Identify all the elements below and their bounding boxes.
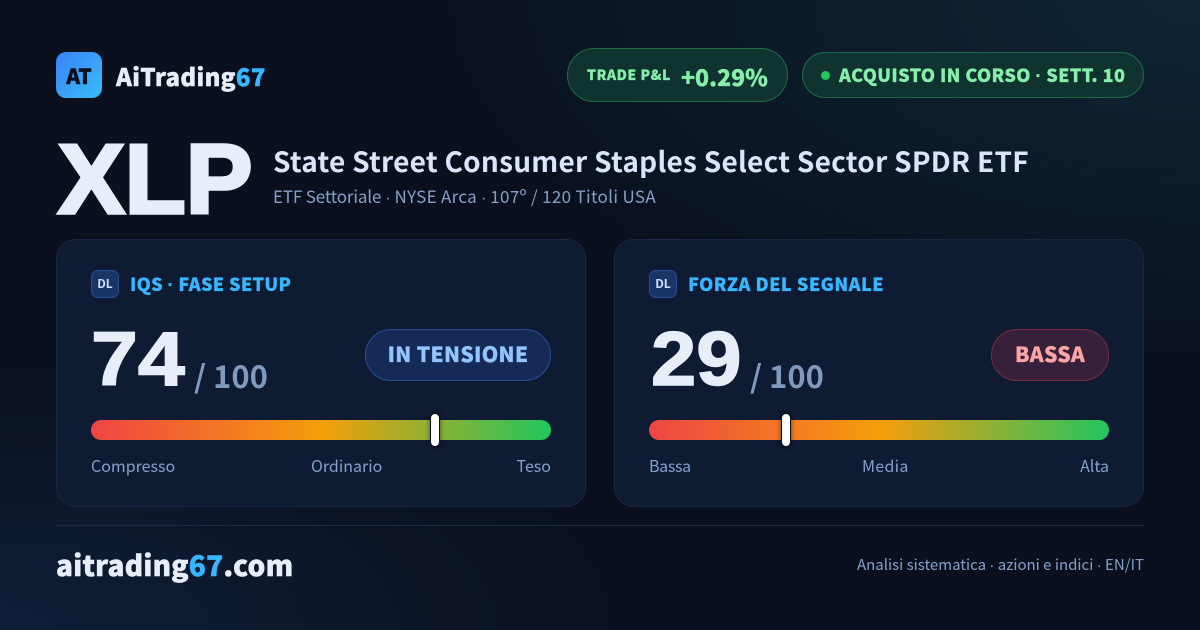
icon: DL bbox=[649, 270, 677, 298]
status pill: IN TENSIONE bbox=[388, 339, 528, 369]
badge: status bbox=[802, 52, 1144, 98]
gauge label mid: Ordinario bbox=[311, 453, 382, 477]
brand name: AiTrading67 bbox=[116, 58, 266, 93]
score scale: / 100 bbox=[750, 352, 824, 397]
footer tagline: Analisi sistematica · azioni e indici · EN/IT bbox=[857, 554, 1144, 575]
badge: trade P&L bbox=[567, 48, 788, 102]
icon: DL bbox=[91, 270, 119, 298]
icon: DL: DL bbox=[655, 275, 671, 292]
panel: IQS fase setup bbox=[56, 239, 586, 507]
badge: trade P&L: TRADE P&L bbox=[587, 65, 671, 85]
panel heading: IQS · FASE SETUP bbox=[130, 271, 291, 297]
fund name: State Street Consumer Staples Select Sector SPDR ETF bbox=[273, 141, 1029, 181]
gauge label low: Compresso bbox=[91, 453, 175, 477]
gradient gauge bbox=[91, 420, 551, 440]
badge: trade P&L: +0.29% bbox=[681, 59, 768, 93]
panel heading: FORZA DEL SEGNALE bbox=[688, 271, 884, 297]
gauge label low: Bassa bbox=[649, 453, 691, 477]
badge: status: ACQUISTO IN CORSO · SETT. 10 bbox=[839, 62, 1125, 88]
divider bbox=[56, 525, 1144, 526]
gauge label mid: Media bbox=[862, 453, 909, 477]
ticker: XLP bbox=[58, 124, 252, 234]
panel: forza del segnale bbox=[614, 239, 1144, 507]
score scale: / 100 bbox=[194, 352, 268, 397]
gradient gauge bbox=[649, 420, 1109, 440]
score: 29 bbox=[651, 317, 741, 402]
footer site: aitrading67.com bbox=[56, 545, 293, 585]
gauge marker bbox=[781, 413, 791, 447]
gauge label high: Alta bbox=[1080, 453, 1109, 477]
status pill bbox=[991, 329, 1109, 381]
logo icon: AT bbox=[66, 61, 92, 91]
score: 74 bbox=[91, 317, 185, 402]
fund subtitle: ETF Settoriale · NYSE Arca · 107º / 120 Titoli USA bbox=[273, 183, 656, 208]
status pill bbox=[365, 329, 551, 381]
gauge marker bbox=[430, 413, 440, 447]
status pill: BASSA bbox=[1015, 339, 1085, 369]
logo icon bbox=[56, 52, 102, 98]
icon: DL: DL bbox=[97, 275, 113, 292]
gauge label high: Teso bbox=[517, 453, 551, 477]
